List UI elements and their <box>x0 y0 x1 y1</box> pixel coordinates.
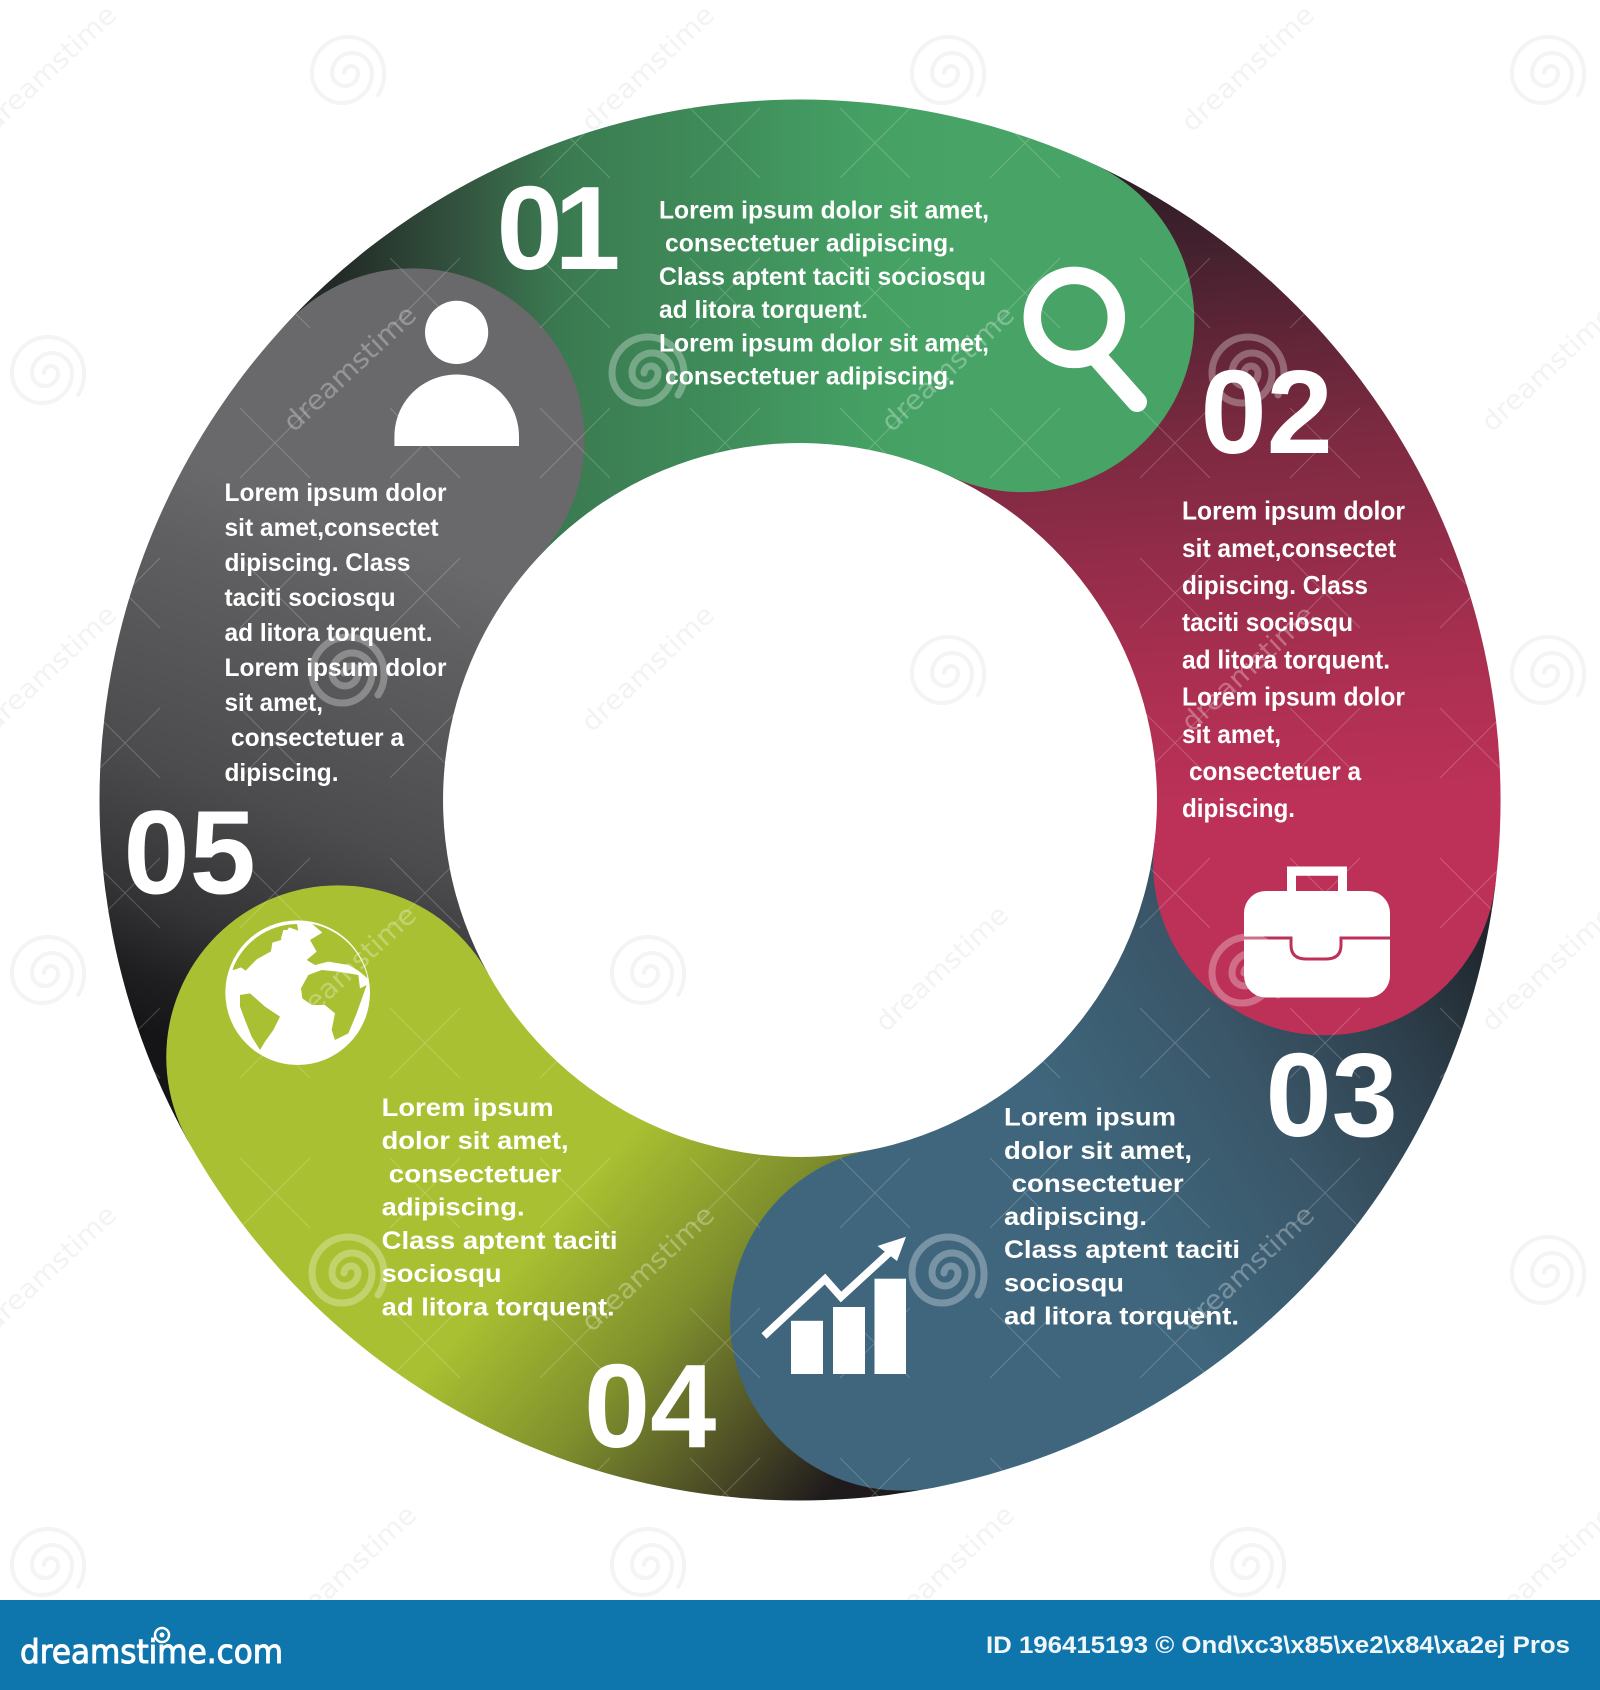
text block 05: consectetuer a <box>231 724 405 752</box>
band 02 crimson <box>950 165 1501 884</box>
text block 05: sit amet,consectet <box>224 514 439 542</box>
panel 01 content <box>496 162 1137 402</box>
text block 02: ad litora torquent. <box>1182 644 1390 674</box>
icon: person <box>394 301 519 446</box>
footer banner <box>0 1600 1600 1690</box>
text block 03: consectetuer <box>1012 1170 1184 1198</box>
band 01 green <box>287 100 1095 557</box>
text block 04: adipiscing. <box>382 1194 525 1222</box>
watermark on coloured ring: dreamstime <box>277 899 423 1038</box>
text block 01: Class aptent taciti sociosqu <box>659 263 986 291</box>
text block 03: sociosqu <box>1004 1269 1124 1297</box>
pale watermark on white background: dreamstime <box>575 599 721 738</box>
text block 02: Lorem ipsum dolor <box>1182 682 1405 712</box>
watermark on coloured ring: dreamstime <box>1175 1199 1321 1338</box>
segment bands <box>100 100 1501 1500</box>
text block 05: Lorem ipsum dolor <box>224 654 447 682</box>
number 01: 01 <box>496 162 620 295</box>
panel 02 content <box>1182 346 1405 998</box>
panel 04 content <box>225 920 716 1473</box>
text block 02: taciti sociosqu <box>1182 607 1353 637</box>
text block 02: sit amet,consectet <box>1182 533 1396 563</box>
watermark on coloured ring: dreamstime <box>277 299 423 438</box>
image id credit: ID 196415193 © Ond\xc3\x85\xe2\x84\xa2ej Pros <box>986 1632 1570 1659</box>
text block 05: sit amet, <box>224 689 323 717</box>
text block 03: adipiscing. <box>1004 1203 1147 1231</box>
icon: globe <box>225 920 370 1065</box>
head 02 crimson <box>1153 692 1497 1035</box>
icon: magnifying glass <box>1032 275 1137 402</box>
text block 04: consectetuer <box>389 1160 562 1188</box>
text block 03: dolor sit amet, <box>1004 1137 1192 1165</box>
text block 02: dipiscing. Class <box>1182 570 1368 600</box>
dreamstime logo: dreamstime.com <box>20 1632 283 1671</box>
text block 01 <box>659 196 989 390</box>
text block 02: sit amet, <box>1182 719 1281 749</box>
watermark on coloured ring: dreamstime <box>1175 599 1321 738</box>
number 05: 05 <box>124 786 256 920</box>
pale watermark on white background: dreamstime <box>277 1499 423 1638</box>
band 05 grey <box>100 323 539 1141</box>
text block 01: consectetuer adipiscing. <box>665 230 955 258</box>
text block 02: Lorem ipsum dolor <box>1182 496 1405 526</box>
segment rounded heads <box>166 149 1497 1491</box>
text block 04: sociosqu <box>382 1260 502 1288</box>
text block 01: Lorem ipsum dolor sit amet, <box>659 196 989 224</box>
head 04 olive <box>166 885 510 1229</box>
text block 04: ad litora torquent. <box>382 1293 615 1321</box>
text block 01: consectetuer adipiscing. <box>665 362 955 390</box>
text block 05: dipiscing. Class <box>224 549 410 577</box>
band 04 olive <box>188 974 935 1500</box>
text block 04: Lorem ipsum <box>382 1094 554 1122</box>
number 04: 04 <box>584 1340 716 1473</box>
pale watermark on white background: dreamstime <box>869 899 1015 1038</box>
watermark on coloured ring: dreamstime <box>575 1199 721 1338</box>
icon: briefcase <box>1244 866 1390 998</box>
head 03 blue <box>730 1147 1074 1491</box>
text block 01: ad litora torquent. <box>659 296 868 324</box>
text block 05 <box>224 479 447 787</box>
icon: rising bar chart <box>764 1237 906 1374</box>
panel 05 content <box>124 301 519 920</box>
watermark crosshair lines <box>100 108 1500 1497</box>
text block 03 <box>1004 1104 1240 1330</box>
text block 03: Class aptent taciti <box>1004 1236 1240 1264</box>
pale watermark on white background: dreamstime <box>575 0 721 138</box>
band 03 blue <box>869 843 1496 1487</box>
text block 02 <box>1182 496 1405 823</box>
watermark on coloured ring <box>277 299 1321 1338</box>
text block 02: consectetuer a <box>1189 756 1361 786</box>
text block 05: dipiscing. <box>224 759 338 787</box>
text block 01: Lorem ipsum dolor sit amet, <box>659 329 989 357</box>
text block 04: Class aptent taciti <box>382 1227 618 1255</box>
head 01 green <box>851 149 1194 492</box>
text block 03: ad litora torquent. <box>1004 1302 1239 1330</box>
watermark on coloured ring: dreamstime <box>875 299 1021 438</box>
text block 03: Lorem ipsum <box>1004 1104 1176 1132</box>
text block 05: Lorem ipsum dolor <box>224 479 447 507</box>
pale watermark on white background: dreamstime <box>1175 0 1321 138</box>
text block 02: dipiscing. <box>1182 793 1295 823</box>
pale watermark on white background: dreamstime <box>875 1499 1021 1638</box>
panel 03 content <box>764 1029 1398 1374</box>
text block 04: dolor sit amet, <box>382 1127 569 1155</box>
text block 04 <box>382 1094 618 1321</box>
text block 05: taciti sociosqu <box>224 584 396 612</box>
head 05 grey <box>241 268 584 612</box>
number 03: 03 <box>1266 1029 1398 1162</box>
text block 05: ad litora torquent. <box>224 619 432 647</box>
number 02: 02 <box>1200 346 1333 479</box>
